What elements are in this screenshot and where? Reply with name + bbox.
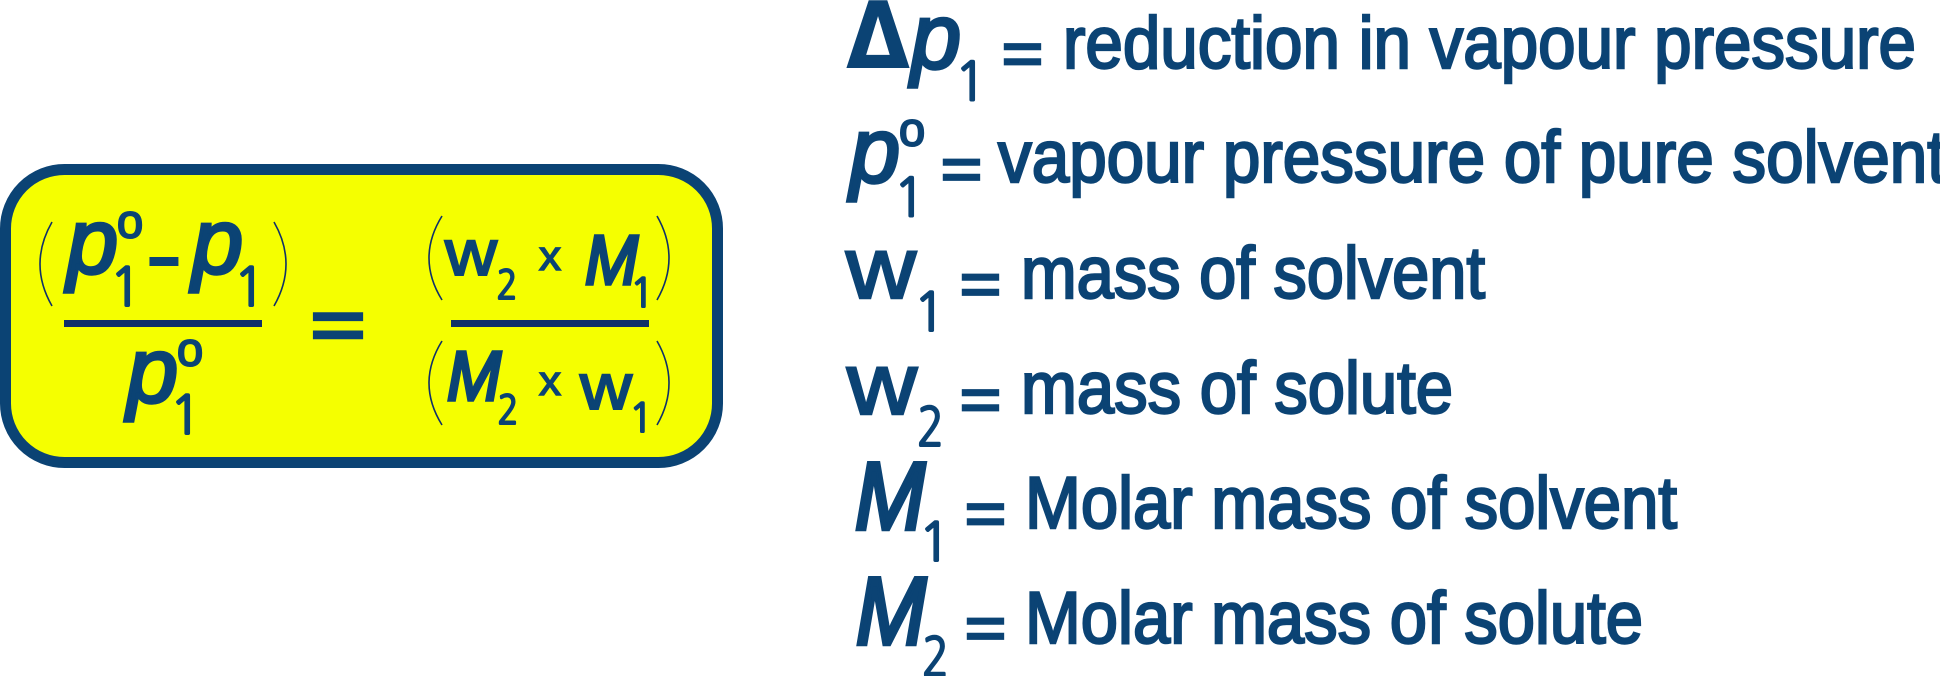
definition: vapour pressure of pure solvent: = [941, 136, 982, 202]
left denominator [124, 320, 203, 442]
definition: molar mass of solute: = [965, 594, 1006, 662]
definition: mass of solvent: 1 [914, 286, 946, 339]
right denominator [429, 337, 669, 438]
definition: molar mass of solvent [855, 443, 1677, 569]
left numerator [40, 191, 286, 314]
right denominator: 2 [498, 390, 518, 430]
right denominator: M [447, 337, 502, 415]
definition: molar mass of solute [856, 558, 1643, 676]
definition: mass of solute: 2 [917, 401, 944, 454]
left denominator: o [177, 322, 203, 376]
definition: mass of solute: mass of solute [1021, 348, 1453, 429]
left numerator: 1 [110, 261, 142, 314]
definition: molar mass of solute: Molar mass of solute [1025, 578, 1643, 659]
left numerator: p [189, 191, 243, 293]
right denominator: 1 [629, 398, 653, 438]
definition: mass of solvent: w [845, 220, 917, 317]
definition: reduction in vapour pressure: = [1002, 20, 1043, 87]
equals sign: = [310, 287, 366, 363]
formula panel [6, 170, 718, 462]
left denominator: 1 [170, 389, 202, 442]
left denominator: p [124, 320, 178, 422]
left numerator: - [145, 213, 183, 297]
yellow rounded box [6, 170, 718, 462]
definition: mass of solute [846, 336, 1453, 454]
definition: reduction in vapour pressure [846, 0, 1916, 108]
definition: molar mass of solvent: 1 [918, 516, 951, 569]
definition: molar mass of solvent: Molar mass of solvent [1025, 463, 1677, 544]
right numerator: w [444, 216, 498, 289]
definition: molar mass of solvent: = [965, 480, 1006, 547]
definition: reduction in vapour pressure: 1 [954, 56, 987, 108]
definition: vapour pressure of pure solvent: 1 [894, 172, 926, 224]
definition: mass of solute: w [846, 336, 918, 433]
right numerator [429, 216, 669, 313]
definition: mass of solvent: mass of solvent [1021, 233, 1485, 314]
right fraction bar [451, 320, 649, 327]
definition: mass of solvent: = [960, 250, 1001, 318]
definition: mass of solvent [845, 220, 1485, 339]
right numerator: 2 [496, 265, 518, 305]
right fraction [429, 216, 669, 438]
right numerator: x [539, 232, 561, 279]
definition: molar mass of solvent: M [855, 443, 925, 550]
definition: vapour pressure of pure solvent: o [899, 102, 925, 156]
left fraction bar [64, 320, 262, 327]
right numerator: 1 [630, 273, 654, 313]
right numerator: M [585, 221, 639, 299]
left fraction [40, 191, 286, 442]
definition: vapour pressure of pure solvent [847, 100, 1940, 224]
left numerator: p [64, 191, 118, 293]
right denominator: x [539, 357, 561, 404]
right denominator: w [579, 350, 633, 423]
definitions list [845, 0, 1940, 676]
definition: mass of solute: = [960, 366, 1001, 433]
definition: molar mass of solute: M [856, 558, 926, 665]
left numerator: 1 [234, 261, 266, 314]
left numerator: o [117, 194, 143, 248]
definition: vapour pressure of pure solvent: p [847, 100, 900, 202]
